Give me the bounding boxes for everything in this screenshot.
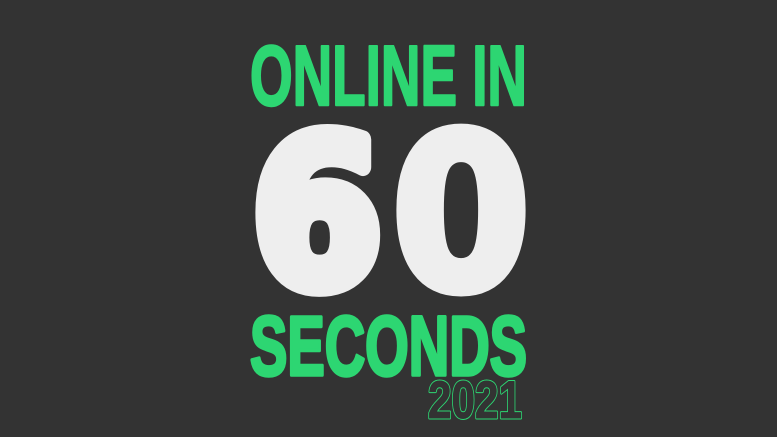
big number: 60 bbox=[252, 90, 530, 339]
big number: 60: 0 bbox=[392, 90, 530, 339]
big number: 60: 6 bbox=[252, 96, 382, 334]
year: 2021 outlined: 2021 bbox=[428, 371, 522, 430]
year: 2021 outlined: 2021 bbox=[428, 371, 522, 430]
heading: seconds: SECONDS bbox=[250, 299, 527, 393]
heading: online in: ONLINE IN bbox=[250, 29, 527, 124]
